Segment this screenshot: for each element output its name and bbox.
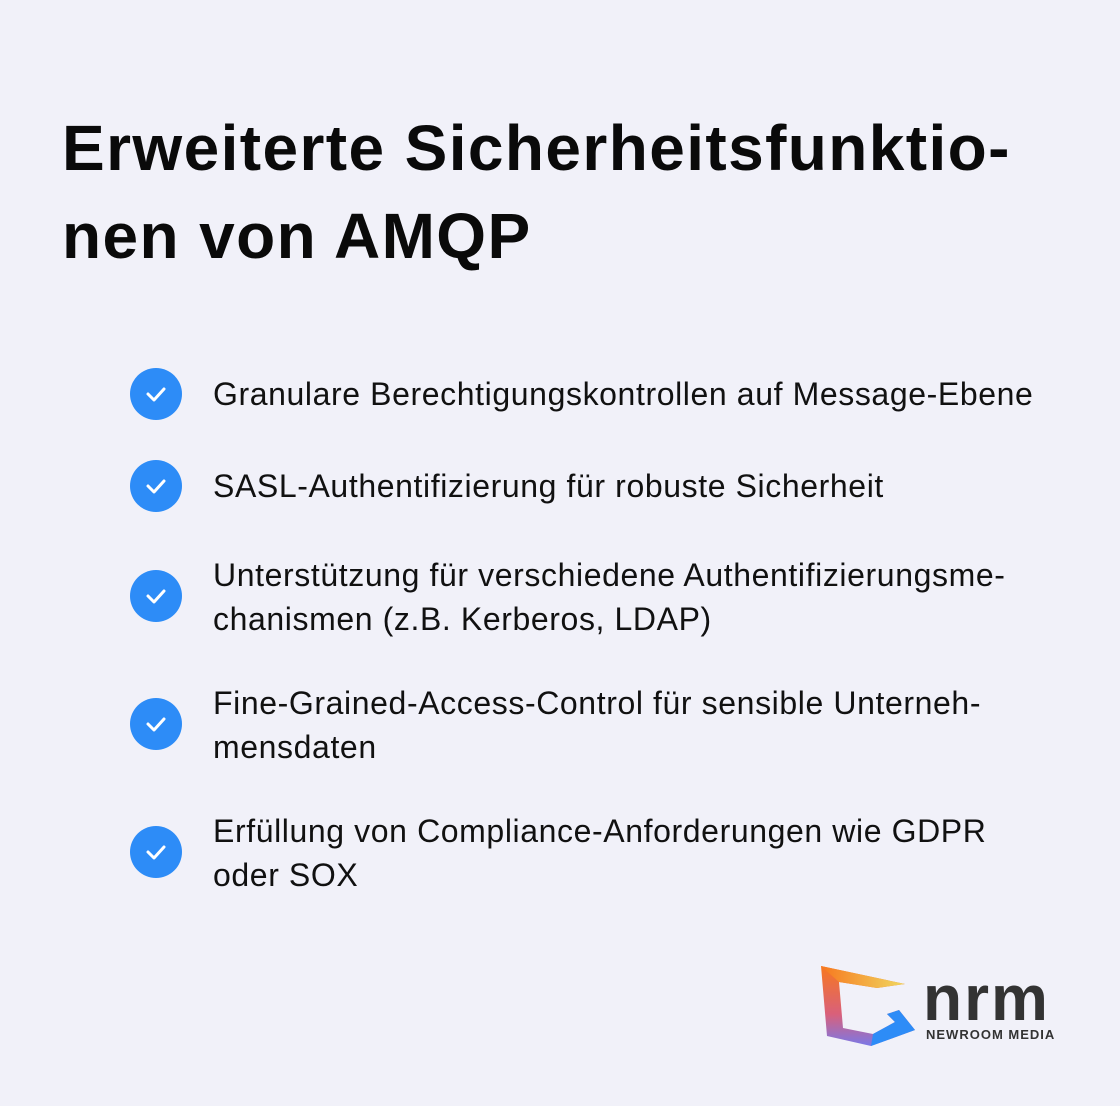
title: Erweiterte Sicherheitsfunktio- — [62, 112, 1011, 184]
text: oder SOX — [213, 857, 358, 893]
text — [213, 813, 986, 893]
text — [213, 685, 981, 765]
item 2 — [130, 460, 884, 512]
icon: check — [130, 368, 182, 420]
text: mensdaten — [213, 729, 377, 765]
item 4 — [130, 685, 981, 765]
icon: check — [130, 698, 182, 750]
item 3 — [130, 557, 1006, 637]
text: Erfüllung von Compliance-Anforderungen wie GDPR — [213, 813, 986, 849]
text: SASL-Authentifizierung für robuste Sicherheit — [213, 468, 884, 504]
logo: NEWROOM MEDIA — [926, 1027, 1055, 1042]
icon: check — [130, 570, 182, 622]
logo text: nrm — [923, 962, 1050, 1034]
text: Unterstützung für verschiedene Authentifizierungsme- — [213, 557, 1006, 593]
text: Fine-Grained-Access-Control für sensible Unterneh- — [213, 685, 981, 721]
item 5 — [130, 813, 986, 893]
item 1 — [130, 368, 1033, 420]
title: nen von AMQP — [62, 200, 532, 272]
text: chanismen (z.B. Kerberos, LDAP) — [213, 601, 712, 637]
icon: check — [130, 460, 182, 512]
icon: check — [130, 826, 182, 878]
text — [213, 557, 1006, 637]
logo mark — [821, 966, 915, 1046]
title — [62, 112, 1011, 272]
logo — [821, 962, 1055, 1046]
text: Granulare Berechtigungskontrollen auf Message-Ebene — [213, 376, 1033, 412]
